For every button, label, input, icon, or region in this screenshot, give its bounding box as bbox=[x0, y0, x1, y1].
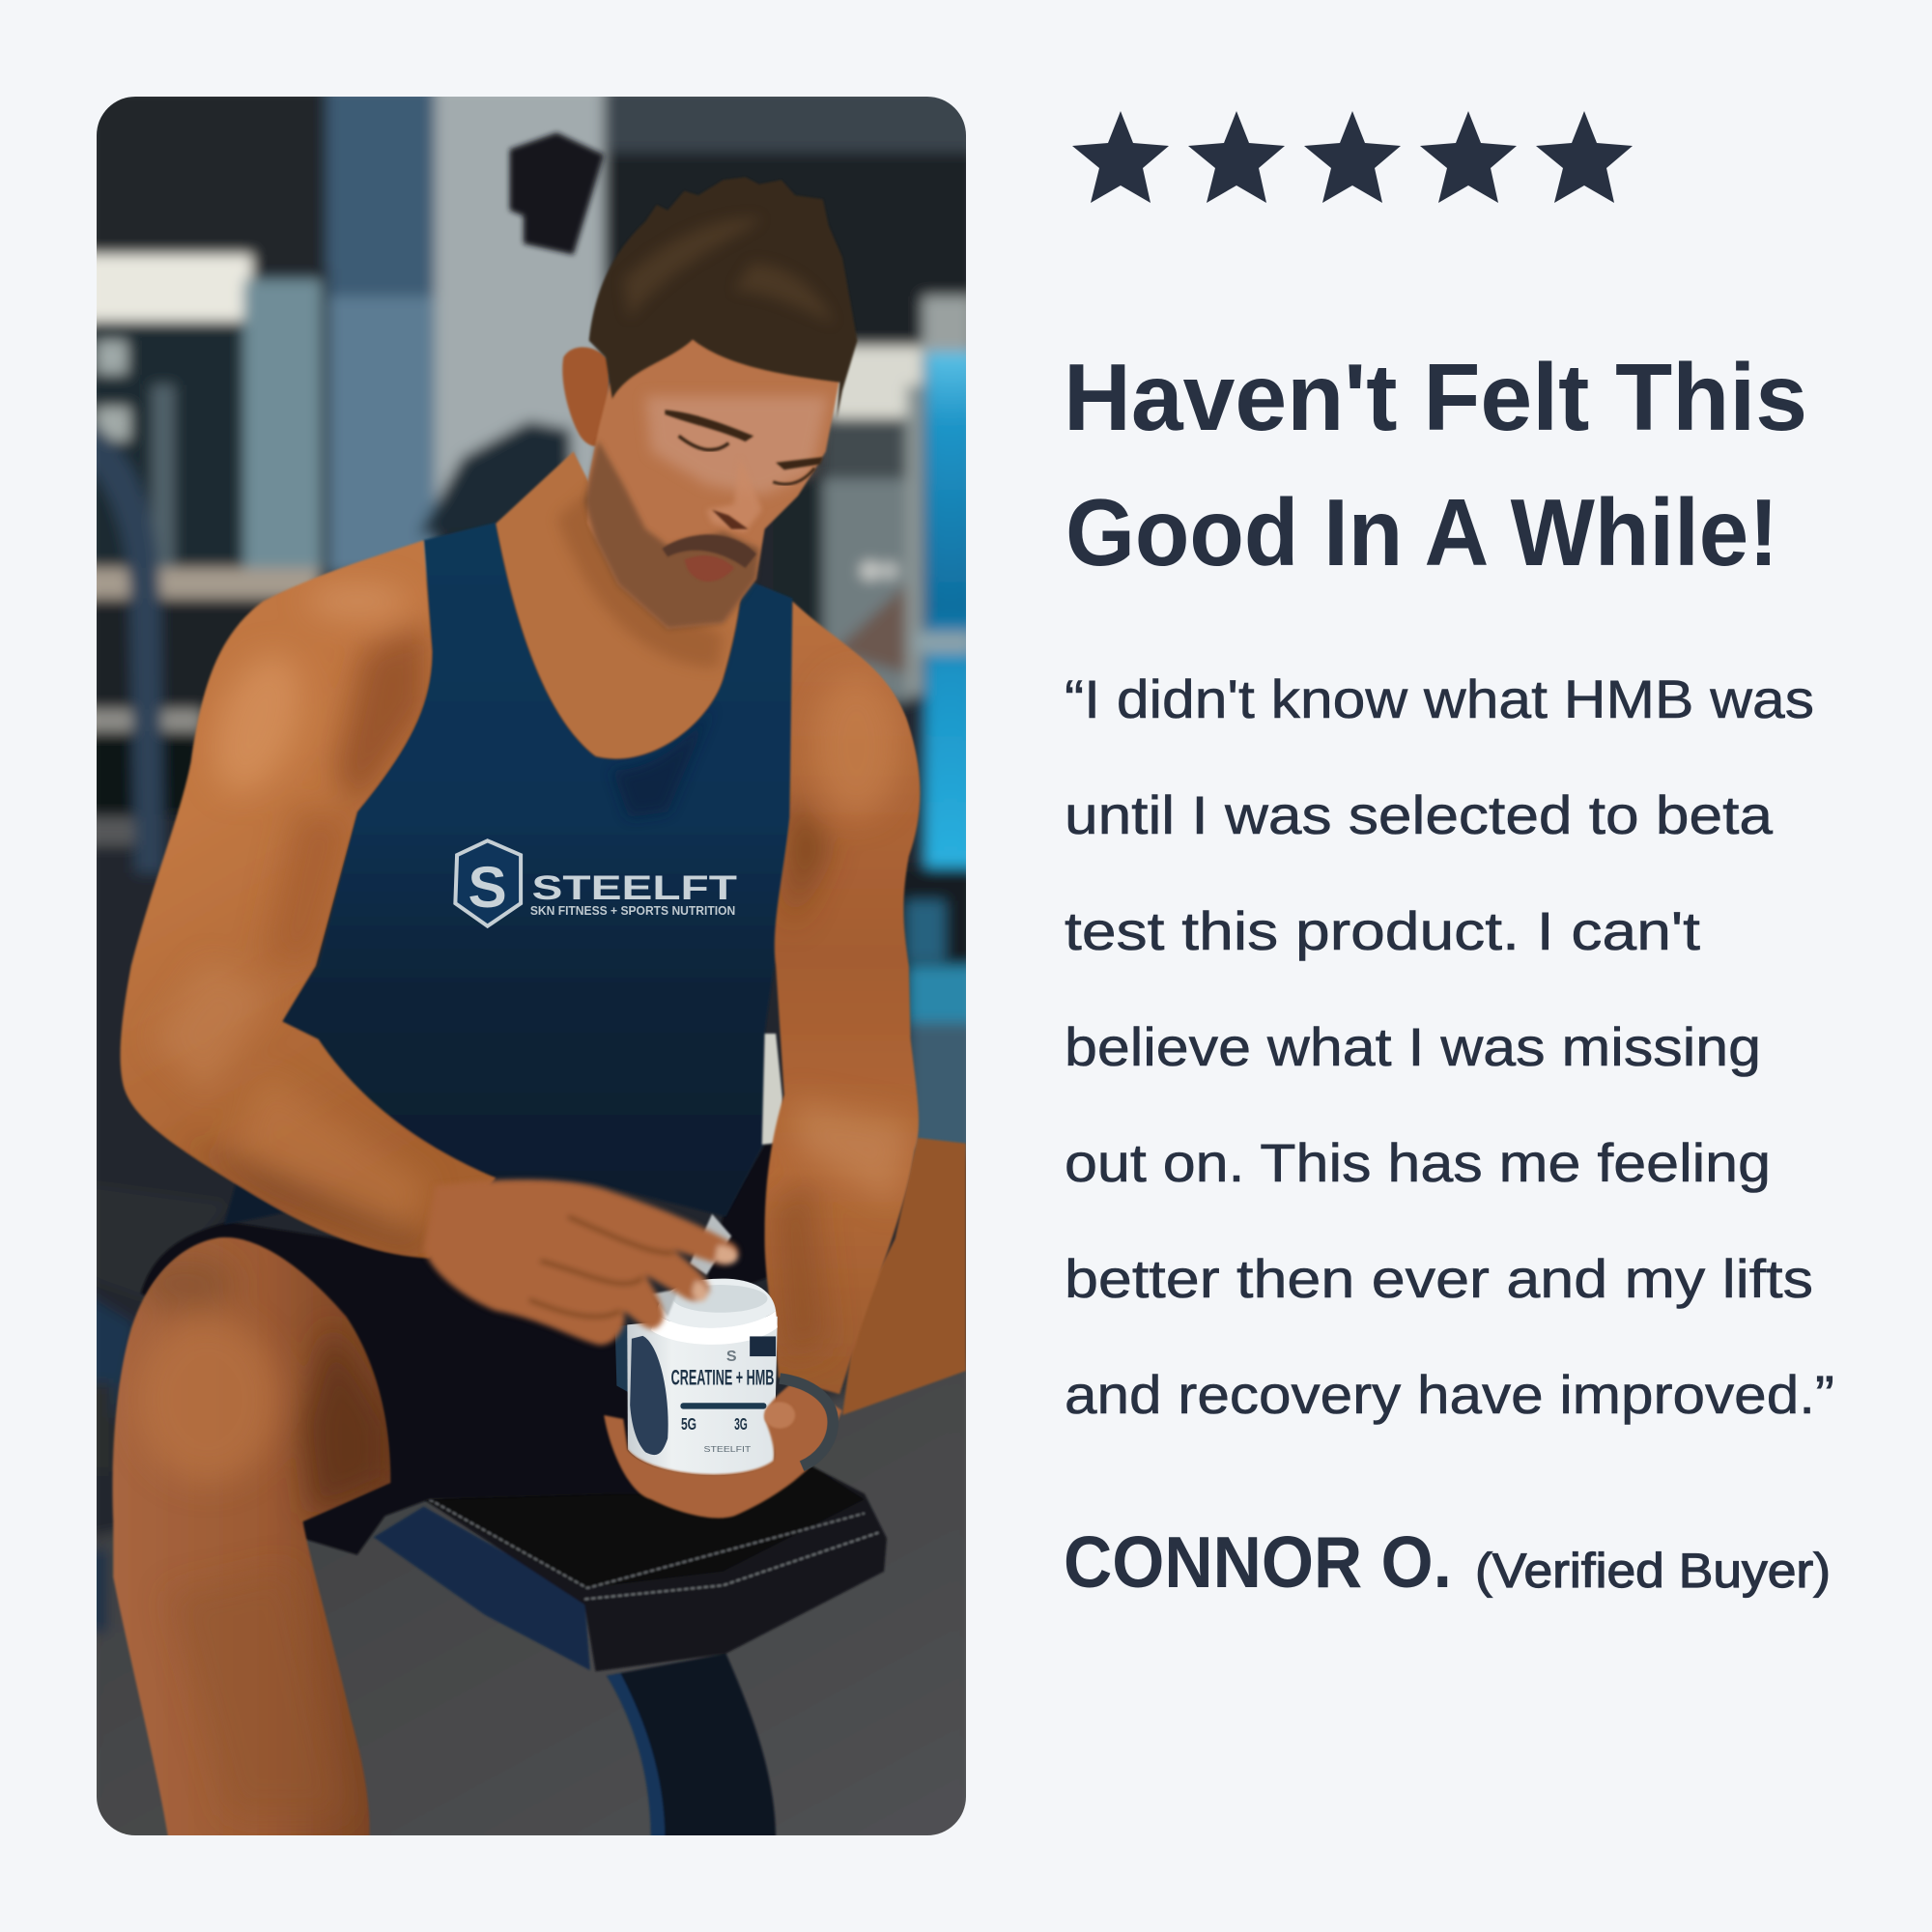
testimonial quote: “I didn't know what HMB was bbox=[1065, 668, 1814, 729]
jar back label bbox=[615, 1324, 632, 1394]
face highlight bbox=[645, 396, 829, 496]
testimonial quote: until I was selected to beta bbox=[1065, 784, 1774, 845]
testimonial quote bbox=[1065, 668, 1834, 1425]
right eye and brow bbox=[773, 457, 823, 484]
left arm bbox=[120, 540, 496, 1258]
nose shadow bbox=[712, 510, 748, 529]
testimonial quote: believe what I was missing bbox=[1065, 1016, 1761, 1077]
reviewer name: CONNOR O. bbox=[1064, 1521, 1452, 1603]
jar dose right: 3G bbox=[734, 1414, 748, 1434]
mouth bbox=[684, 555, 734, 582]
neck and chest bbox=[496, 451, 743, 759]
left leg bbox=[113, 1237, 390, 1840]
wristband bbox=[780, 1378, 833, 1466]
weight bench bbox=[374, 1466, 887, 1840]
stubble bbox=[584, 440, 759, 629]
thumb bbox=[764, 1402, 795, 1429]
hand holding jar bbox=[604, 1380, 842, 1519]
tank top bbox=[224, 523, 795, 1225]
headline bbox=[1064, 344, 1807, 585]
moustache bbox=[662, 534, 756, 568]
hair bbox=[589, 177, 858, 418]
nose bbox=[706, 457, 762, 532]
headline: Good In A While! bbox=[1065, 479, 1778, 585]
jar body bbox=[627, 1317, 778, 1475]
five star rating bbox=[1072, 111, 1633, 203]
tank collar shadow bbox=[614, 728, 700, 815]
left arm highlights and shadows bbox=[152, 584, 429, 1256]
gap beside torso bbox=[762, 1034, 787, 1145]
panel: photo of athlete on gym bench bbox=[86, 86, 979, 1849]
testimonial quote: out on. This has me feeling bbox=[1065, 1132, 1771, 1193]
neck shadow bbox=[556, 485, 724, 668]
logo tagline: SKN FITNESS + SPORTS NUTRITION bbox=[530, 904, 735, 918]
jar rim bbox=[651, 1311, 778, 1345]
face bbox=[587, 335, 839, 629]
jar brand: STEELFIT bbox=[704, 1444, 752, 1454]
verified buyer tag: (Verified Buyer) bbox=[1475, 1544, 1831, 1598]
left eye and brow bbox=[665, 410, 753, 450]
wall speaker bbox=[510, 132, 604, 255]
hand opening jar bbox=[424, 1179, 739, 1345]
testimonial quote: test this product. I can't bbox=[1065, 900, 1700, 961]
black shorts bbox=[141, 1145, 781, 1555]
logo wordmark: STEELFT bbox=[532, 868, 737, 907]
gym background bbox=[86, 86, 979, 1849]
jar product name: CREATINE + HMB bbox=[671, 1365, 774, 1389]
supplement jar bbox=[615, 1279, 778, 1475]
jar S mark: S bbox=[726, 1348, 737, 1365]
star 3 bbox=[1304, 111, 1401, 203]
tank top logo bbox=[455, 840, 737, 926]
star 5 bbox=[1536, 111, 1633, 203]
head bbox=[562, 177, 858, 629]
logo shield bbox=[455, 840, 521, 926]
jar side panel bbox=[630, 1336, 668, 1455]
jar dose left: 5G bbox=[681, 1414, 696, 1434]
jar band bbox=[680, 1403, 766, 1409]
headline: Haven't Felt This bbox=[1064, 344, 1807, 450]
star 4 bbox=[1420, 111, 1517, 203]
star 1 bbox=[1072, 111, 1169, 203]
right arm highlights and shadows bbox=[773, 673, 912, 1361]
right arm bbox=[765, 601, 920, 1394]
testimonial quote: and recovery have improved.” bbox=[1065, 1364, 1834, 1425]
star 2 bbox=[1188, 111, 1285, 203]
ear bbox=[562, 347, 610, 446]
thigh and knee shading bbox=[141, 1252, 390, 1759]
testimonial quote: better then ever and my lifts bbox=[1065, 1248, 1813, 1309]
foil seal bbox=[651, 1214, 731, 1317]
jar tag bbox=[750, 1336, 776, 1356]
right leg bbox=[842, 1138, 966, 1415]
logo shield: S bbox=[469, 854, 507, 920]
hair highlights bbox=[623, 218, 834, 324]
jar inner opening bbox=[673, 1285, 768, 1313]
